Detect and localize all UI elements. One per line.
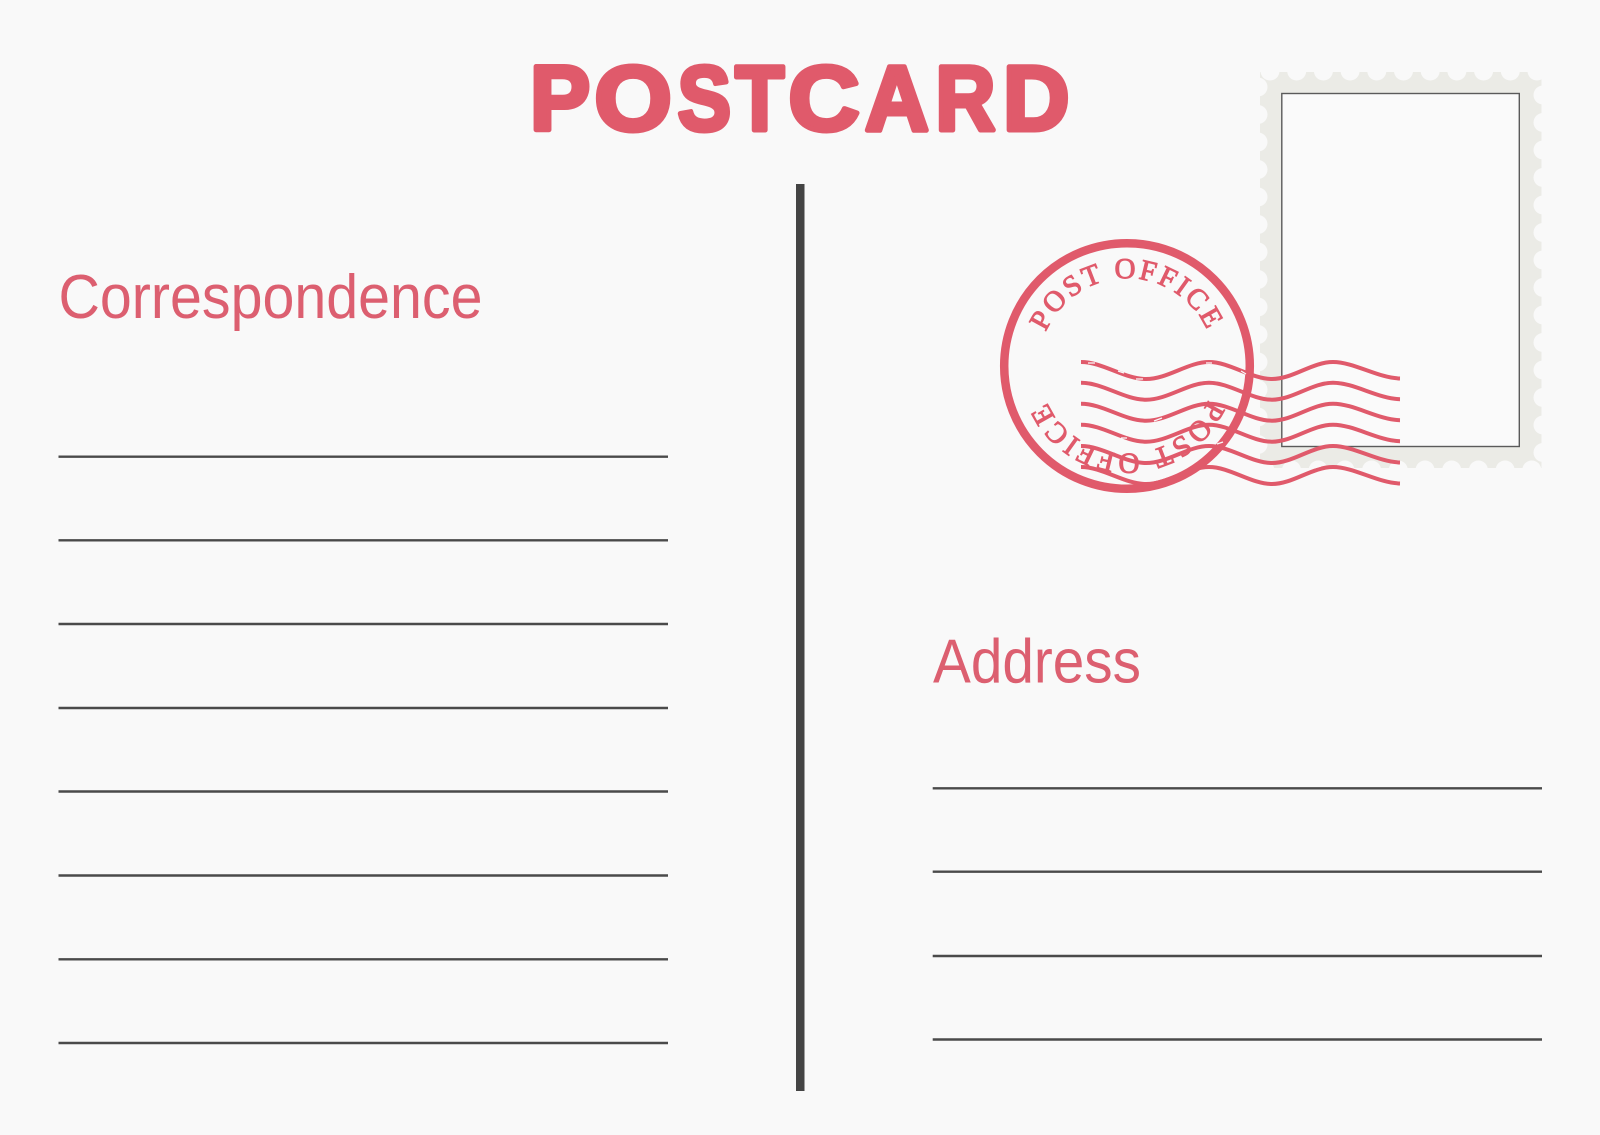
heading: address: Address	[933, 628, 1141, 696]
title: T	[735, 48, 784, 150]
postmark	[1000, 239, 1400, 493]
title	[530, 47, 1069, 151]
writing lines: address	[933, 788, 1542, 1040]
title: D	[1003, 48, 1069, 150]
writing lines: correspondence	[58, 457, 668, 1043]
postmark text: bottom arc: POST OFFICE	[1030, 400, 1226, 474]
title: C	[788, 48, 860, 150]
center divider	[796, 184, 804, 1091]
cancellation waves	[1081, 362, 1400, 484]
postage stamp	[1258, 71, 1545, 470]
postmark ring	[1004, 243, 1250, 489]
title: R	[936, 47, 995, 150]
title: P	[530, 48, 590, 150]
title: S	[678, 48, 731, 150]
title: O	[594, 48, 672, 150]
postmark text: top arc: POST OFFICE	[1028, 258, 1224, 332]
heading: correspondence: Correspondence	[58, 263, 482, 332]
title: A	[865, 48, 929, 151]
